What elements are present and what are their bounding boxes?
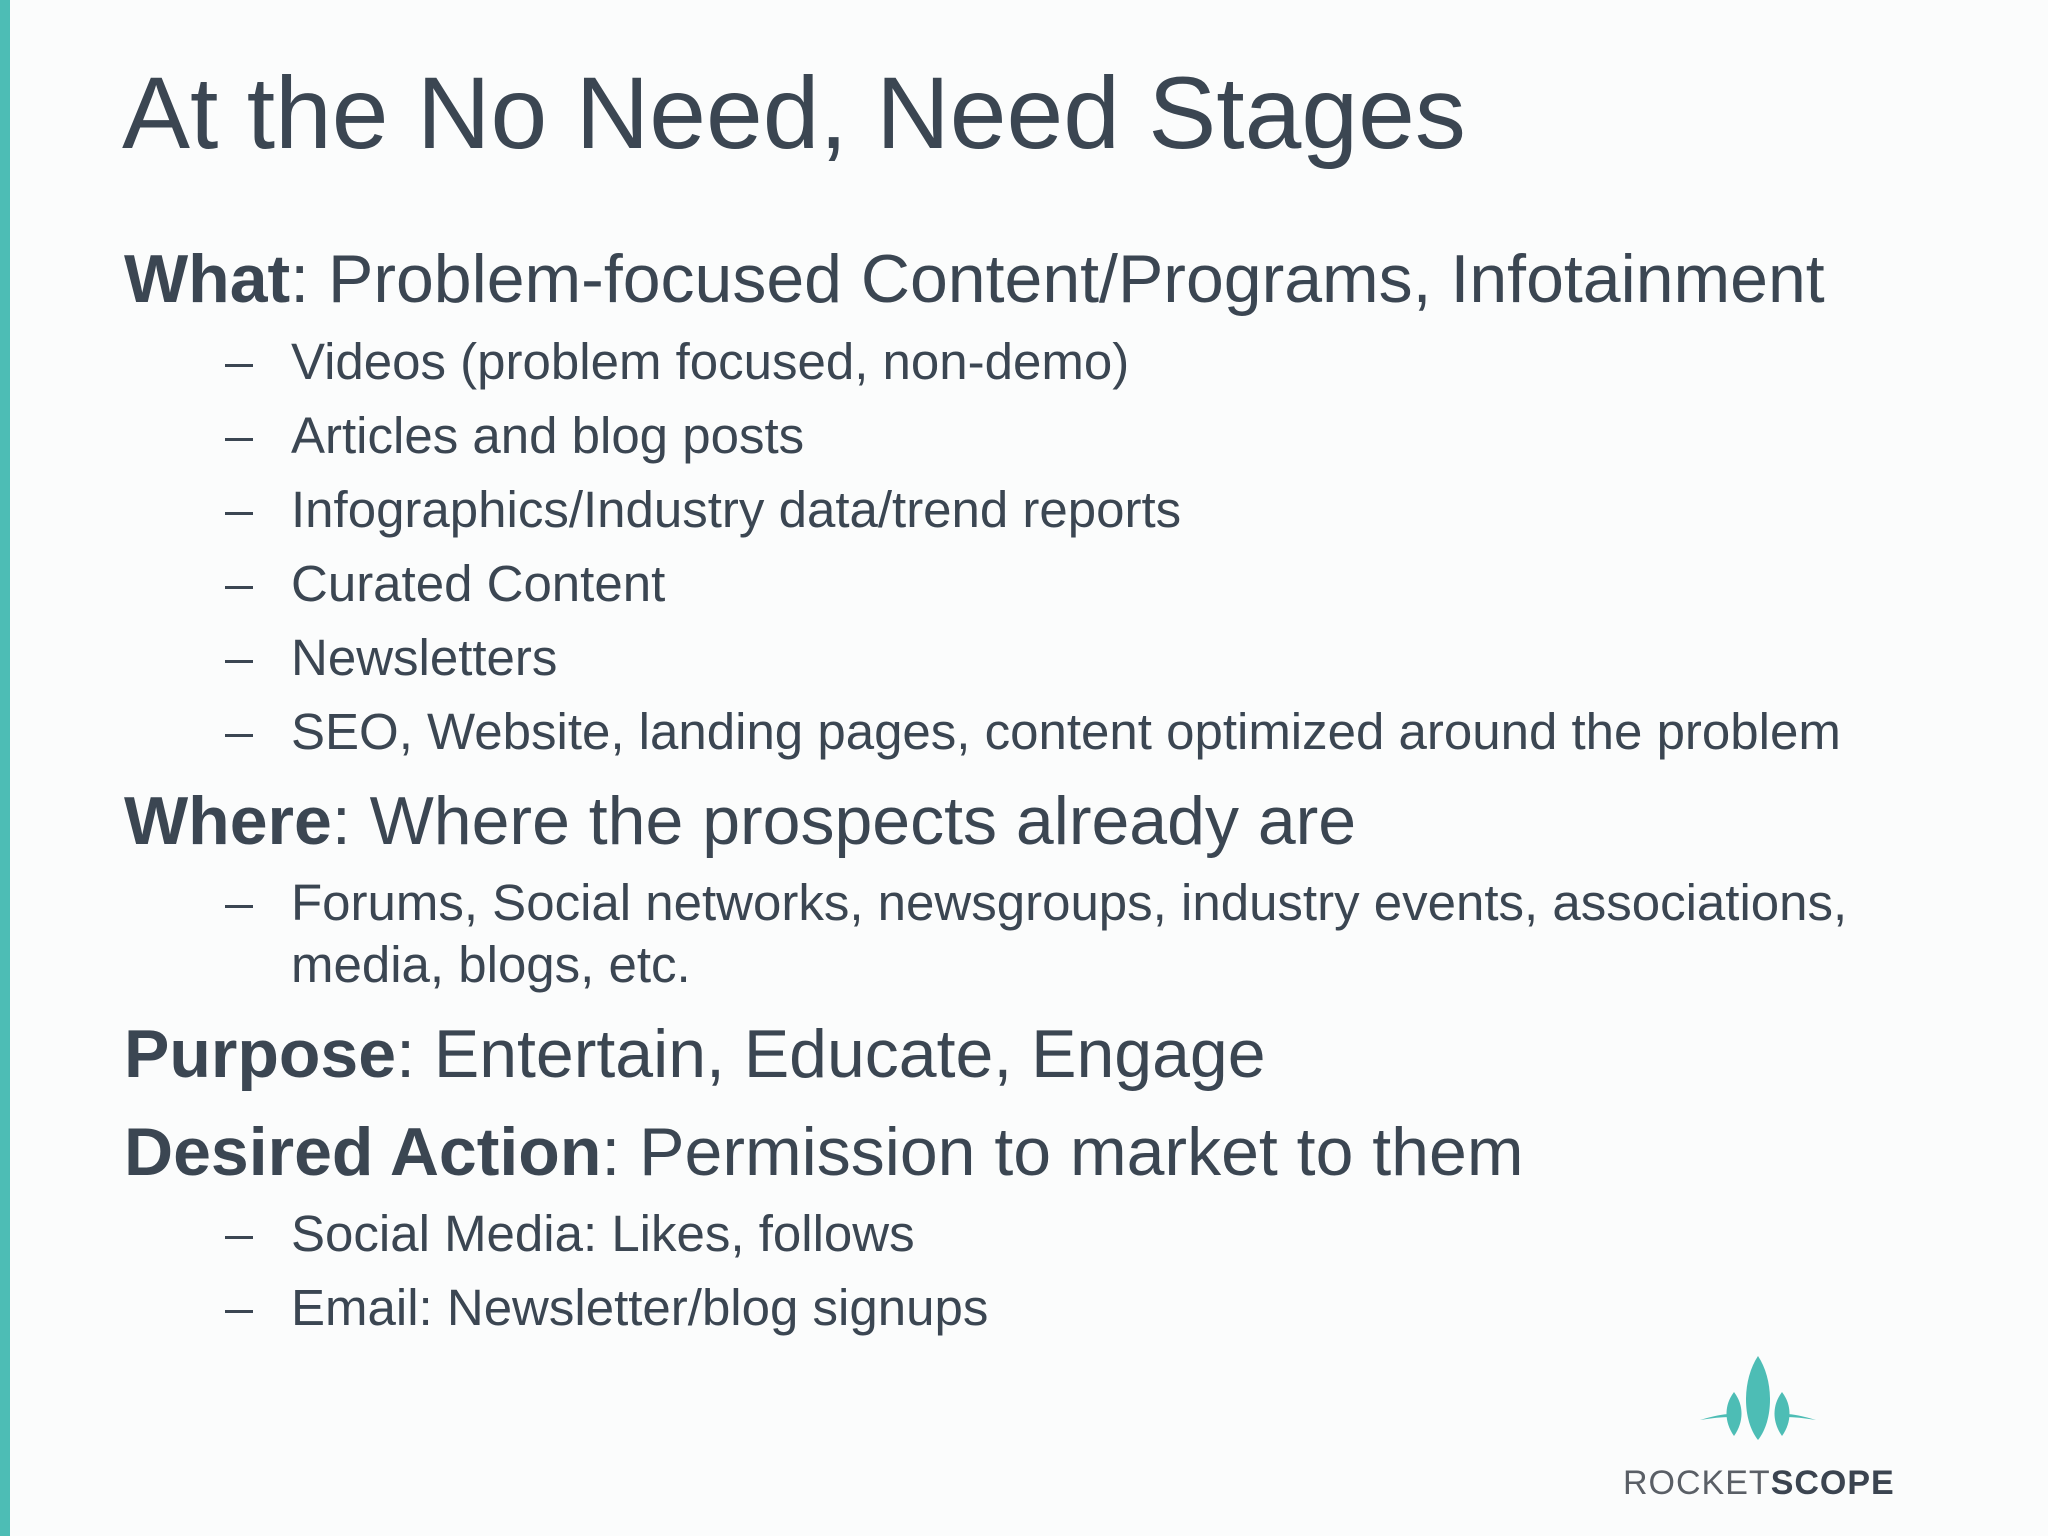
list: what items: Curated Content — [291, 555, 665, 612]
list: what items: Videos (problem focused, non-demo) — [291, 333, 1129, 390]
title: At the No Need, Need Stages — [122, 56, 1466, 170]
heading: what: What: Problem-focused Content/Programs, Infotainment — [124, 241, 1825, 317]
list: what items: Infographics/Industry data/trend reports — [291, 481, 1181, 538]
heading: where: Where: Where the prospects already are — [124, 783, 1356, 859]
list: action items: Social Media: Likes, follows — [291, 1205, 915, 1262]
icon: rocket — [1700, 1356, 1816, 1440]
logo: rocketscope — [1623, 1356, 1895, 1502]
logo text: ROCKETSCOPE — [1623, 1464, 1895, 1502]
list: what items: Articles and blog posts — [291, 407, 804, 464]
accent bar — [0, 0, 10, 1536]
list: where items: Forums, Social networks, newsgroups, industry events, associations, — [291, 874, 1847, 931]
list: what items: Newsletters — [291, 629, 557, 686]
heading: desired action: Desired Action: Permission to market to them — [124, 1114, 1523, 1190]
list: what items — [225, 333, 1841, 760]
list: where items — [225, 874, 1847, 993]
list: action items: Email: Newsletter/blog signups — [291, 1279, 988, 1336]
list: action items — [225, 1205, 988, 1336]
list: what items: SEO, Website, landing pages, content optimized around the problem — [291, 703, 1841, 760]
list: where items: media, blogs, etc. — [291, 936, 691, 993]
heading: purpose: Purpose: Entertain, Educate, Engage — [124, 1016, 1266, 1092]
